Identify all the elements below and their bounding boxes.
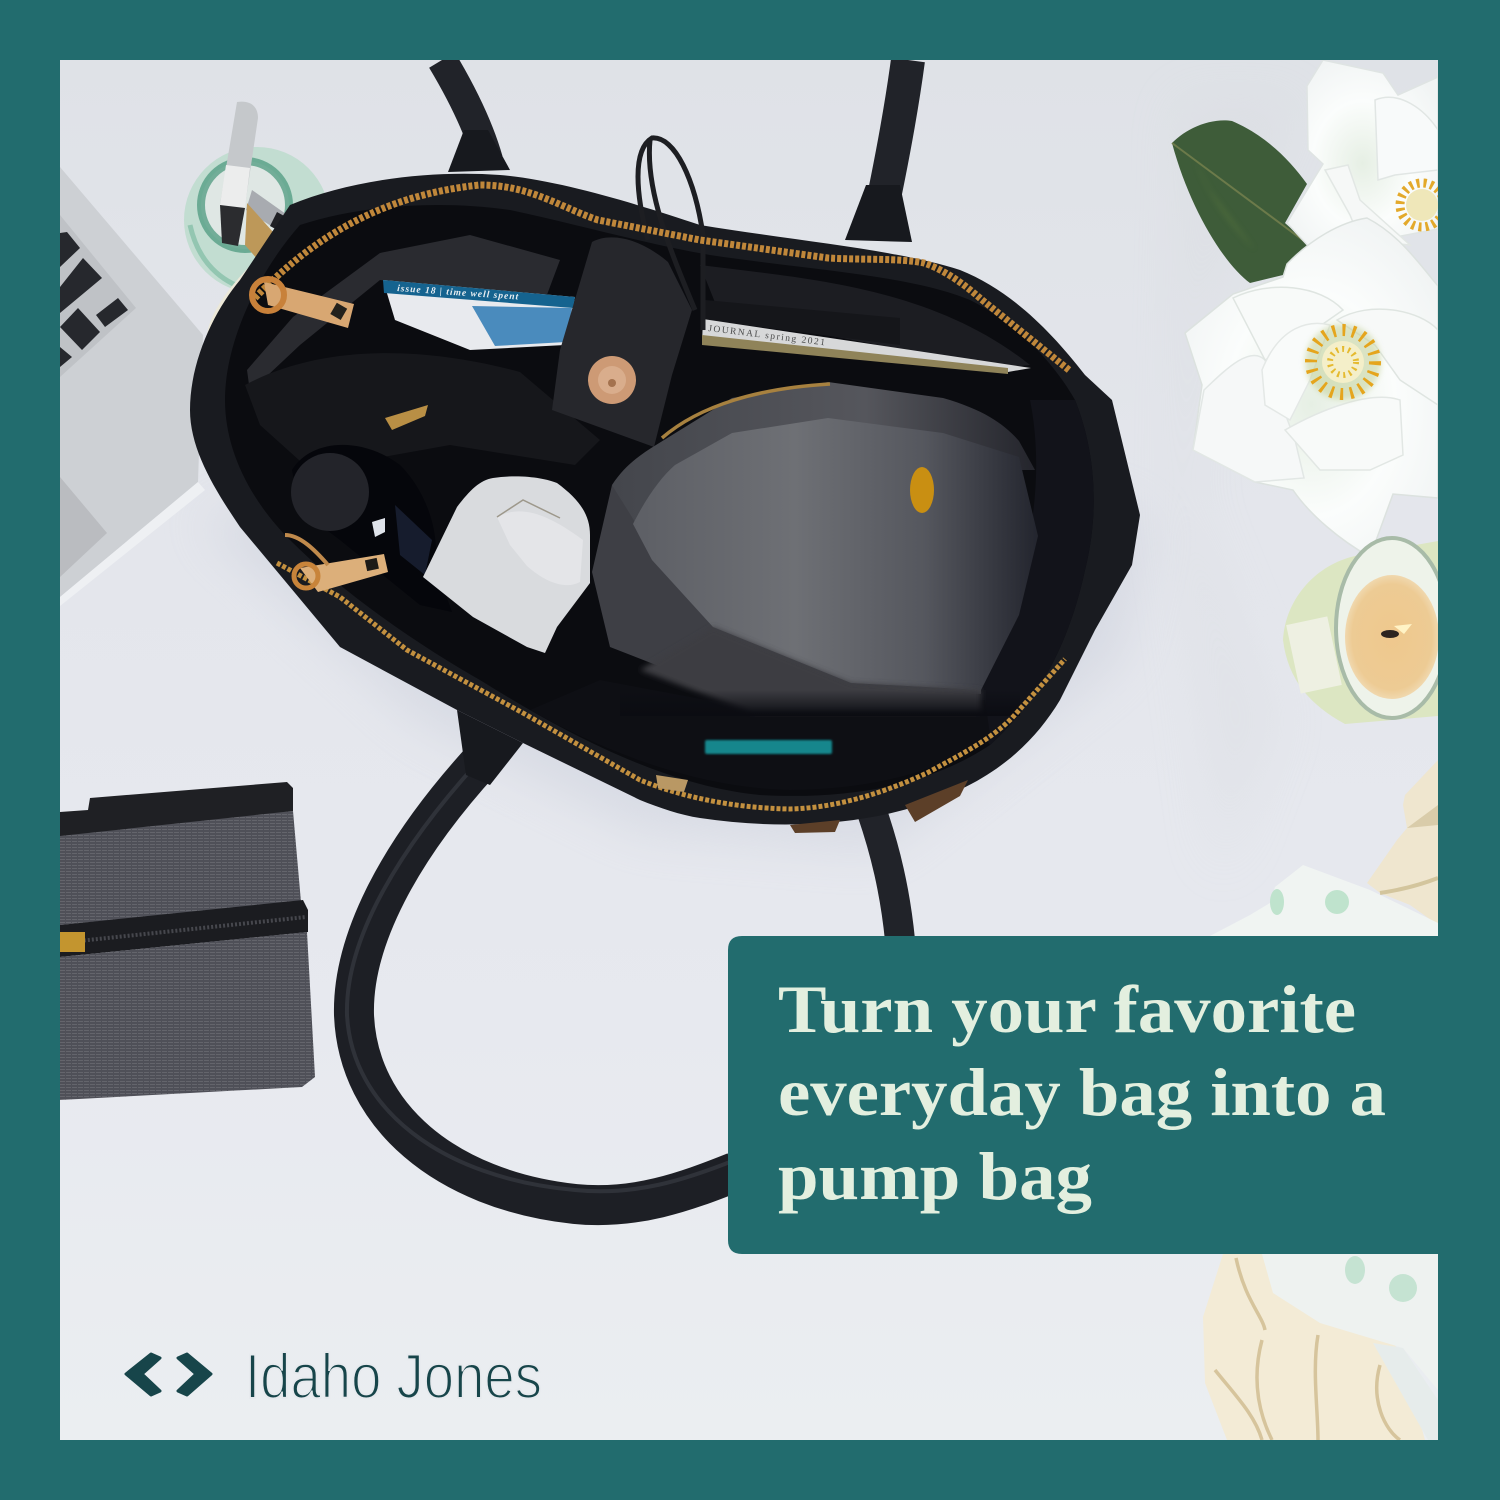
- upper yarn and muslin: [1210, 760, 1438, 936]
- rose gold snap: [588, 356, 636, 404]
- bottom fade: [640, 627, 981, 712]
- callout headline: Turn your favorite: [778, 971, 1356, 1047]
- bottom handle: [347, 710, 900, 1205]
- magazine label: issue 18 | time well spent: [397, 284, 520, 303]
- lower gusset: [592, 485, 981, 702]
- zipper pull lower: [285, 535, 388, 592]
- zipper pull upper: [252, 279, 354, 328]
- small zipper pull: [656, 775, 688, 792]
- pump bag: [592, 382, 1038, 716]
- inner pocket: [245, 353, 600, 470]
- back flower: [1287, 60, 1438, 248]
- left lining fold: [247, 235, 560, 392]
- icon: double chevron: [126, 1354, 211, 1395]
- petal inner left: [1262, 323, 1330, 420]
- handbag body: [190, 138, 1140, 833]
- candle: [1283, 538, 1448, 724]
- strap hardware: [790, 780, 968, 833]
- callout headline: everyday bag into a: [778, 1054, 1386, 1130]
- gold badge: [910, 467, 934, 513]
- snap tab: [552, 237, 692, 447]
- callout panel: [728, 936, 1438, 1254]
- gold zipper top: [255, 185, 1069, 370]
- callout headline: pump bag: [778, 1138, 1092, 1214]
- flower centre: [1305, 324, 1381, 400]
- journal: [702, 319, 1031, 372]
- back stamens: [1406, 189, 1438, 221]
- main flower: [1185, 218, 1438, 557]
- leaf: [1172, 120, 1312, 283]
- teal card: [705, 740, 832, 754]
- soft bag shadow: [244, 532, 1134, 842]
- front face: [633, 418, 1038, 690]
- white flowers: [1172, 60, 1444, 557]
- magazine: [383, 280, 575, 350]
- gold zipper bottom: [277, 563, 1065, 809]
- grid journal cover: [705, 300, 900, 345]
- petal upper: [1233, 287, 1343, 360]
- upper gusset: [612, 382, 1035, 530]
- bag floor: [530, 680, 990, 790]
- water bottle: [300, 445, 386, 464]
- table shadow by flowers: [1170, 100, 1300, 880]
- glass cup with markers: [184, 102, 330, 340]
- bag lining: [225, 205, 1094, 796]
- back lining right: [700, 265, 1030, 368]
- right wall: [982, 400, 1094, 744]
- petal right: [1337, 309, 1438, 405]
- petal bottom: [1285, 397, 1403, 470]
- rolled towel: [423, 476, 590, 653]
- lower yarn and muslin: [1203, 1254, 1438, 1440]
- logo: Idaho Jones: [126, 1342, 542, 1412]
- journal label: JOURNAL spring 2021: [708, 324, 827, 348]
- inner zip pocket pull: [385, 405, 428, 430]
- wordmark: Idaho Jones: [245, 1342, 542, 1412]
- wrist strap: [638, 138, 703, 330]
- zipped pouch: [60, 782, 315, 1100]
- top handles: [429, 60, 925, 194]
- laptop: [60, 167, 205, 606]
- zipper arc: [662, 384, 830, 438]
- petal lower left: [1193, 355, 1304, 482]
- handle bases: [448, 130, 912, 242]
